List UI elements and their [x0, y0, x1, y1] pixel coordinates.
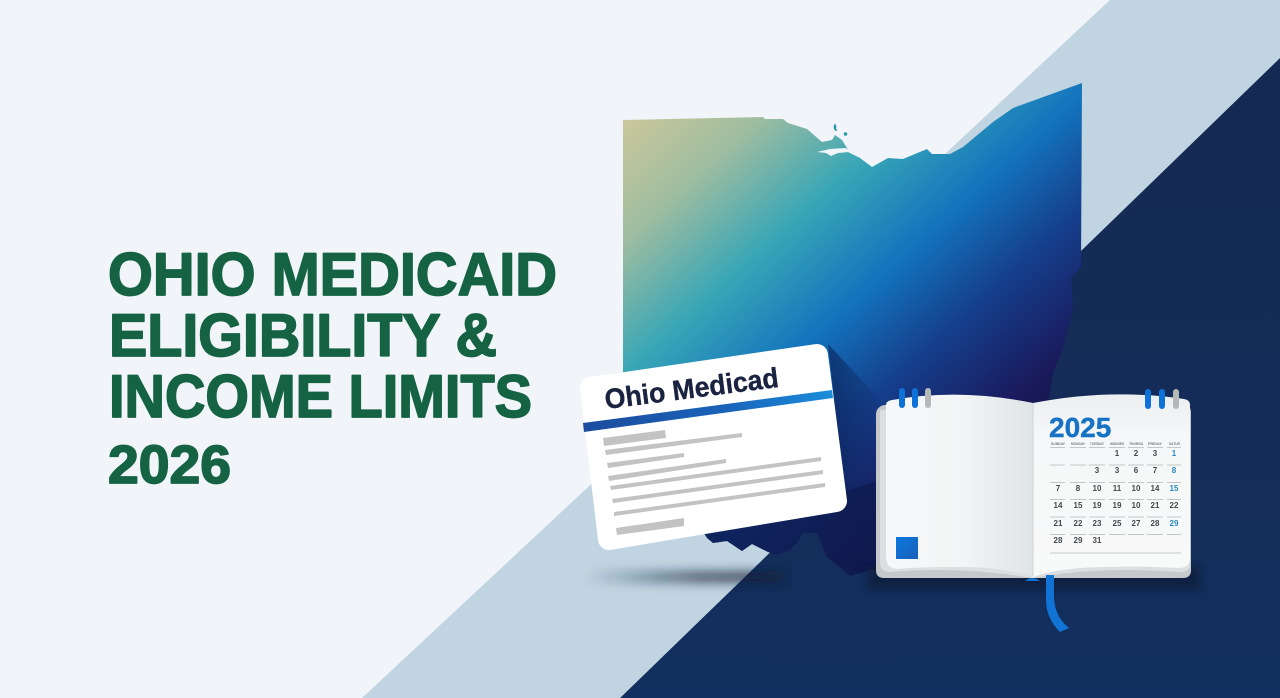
highlighted dates — [1170, 449, 1179, 528]
highlighted dates: 29 — [1170, 519, 1179, 528]
page edge layer — [880, 410, 1190, 578]
left page — [886, 395, 1033, 577]
calendar dates: 3 — [1153, 449, 1158, 458]
title: 2026 — [108, 435, 231, 495]
calendar dates: 29 — [1074, 536, 1083, 545]
calendar dates: 2 — [1134, 449, 1139, 458]
calendar dates: 1 — [1115, 449, 1120, 458]
lake bay — [817, 148, 849, 156]
calendar rules — [1050, 448, 1181, 553]
left rings — [899, 388, 931, 408]
ohio map — [623, 83, 1082, 576]
book cover — [876, 405, 1191, 578]
calendar dates — [1054, 449, 1179, 545]
calendar year: 2025 — [1049, 412, 1111, 443]
weekday labels: SATUR — [1169, 441, 1180, 446]
title: INCOME LIMITS — [109, 363, 532, 430]
title — [108, 241, 557, 495]
calendar dates: 21 — [1151, 501, 1160, 510]
calendar dates: 10 — [1132, 484, 1141, 493]
calendar dates: 3 — [1095, 466, 1100, 475]
card heading: Ohio Medicad — [603, 362, 780, 415]
calendar dates: 7 — [1056, 484, 1061, 493]
card text lines — [603, 430, 825, 535]
medicaid card — [583, 355, 836, 539]
dark shading under card — [704, 482, 876, 576]
right page — [1033, 394, 1190, 577]
calendar dates: 7 — [1153, 466, 1158, 475]
calendar dates: 14 — [1054, 501, 1063, 510]
weekday labels: SUNDAY — [1051, 441, 1065, 446]
card blue band — [583, 390, 833, 432]
calendar dates: 8 — [1076, 484, 1081, 493]
spine shading — [1032, 403, 1034, 576]
calendar dates: 25 — [1113, 519, 1122, 528]
book shadow — [868, 566, 1200, 590]
weekday labels: FRIDAY — [1148, 441, 1162, 446]
weekday labels: TUESDAY — [1090, 441, 1104, 446]
weekday labels: THURSD — [1129, 441, 1143, 446]
calendar dates: 6 — [1134, 466, 1139, 475]
title: ELIGIBILITY & — [109, 302, 497, 369]
calendar dates: 3 — [1115, 466, 1120, 475]
calendar dates: 31 — [1093, 536, 1102, 545]
weekday labels: WEDNES — [1110, 441, 1124, 446]
calendar dates: 21 — [1054, 519, 1063, 528]
bookmark ribbon — [1025, 575, 1069, 632]
calendar dates: 19 — [1093, 501, 1102, 510]
calendar dates: 22 — [1170, 501, 1179, 510]
calendar dates: 28 — [1151, 519, 1160, 528]
lake islands — [834, 124, 847, 136]
calendar dates: 11 — [1113, 484, 1122, 493]
calendar dates: 15 — [1074, 501, 1083, 510]
highlighted dates: 1 — [1172, 449, 1177, 458]
calendar dates: 28 — [1054, 536, 1063, 545]
calendar — [1049, 412, 1181, 553]
title: OHIO MEDICAID — [108, 241, 557, 308]
calendar dates: 22 — [1074, 519, 1083, 528]
blue square — [896, 537, 918, 559]
weekday labels: MONDAY — [1071, 441, 1085, 446]
ground shadow under card — [585, 571, 785, 583]
calendar dates: 23 — [1093, 519, 1102, 528]
calendar dates: 27 — [1132, 519, 1141, 528]
card shadow — [828, 344, 885, 575]
highlighted dates: 15 — [1170, 484, 1179, 493]
calendar dates: 14 — [1151, 484, 1160, 493]
open book — [876, 388, 1191, 578]
right rings — [1145, 389, 1179, 409]
calendar dates: 19 — [1113, 501, 1122, 510]
calendar dates: 10 — [1132, 501, 1141, 510]
weekday labels — [1051, 441, 1180, 446]
calendar dates: 10 — [1093, 484, 1102, 493]
highlighted dates: 8 — [1172, 466, 1177, 475]
